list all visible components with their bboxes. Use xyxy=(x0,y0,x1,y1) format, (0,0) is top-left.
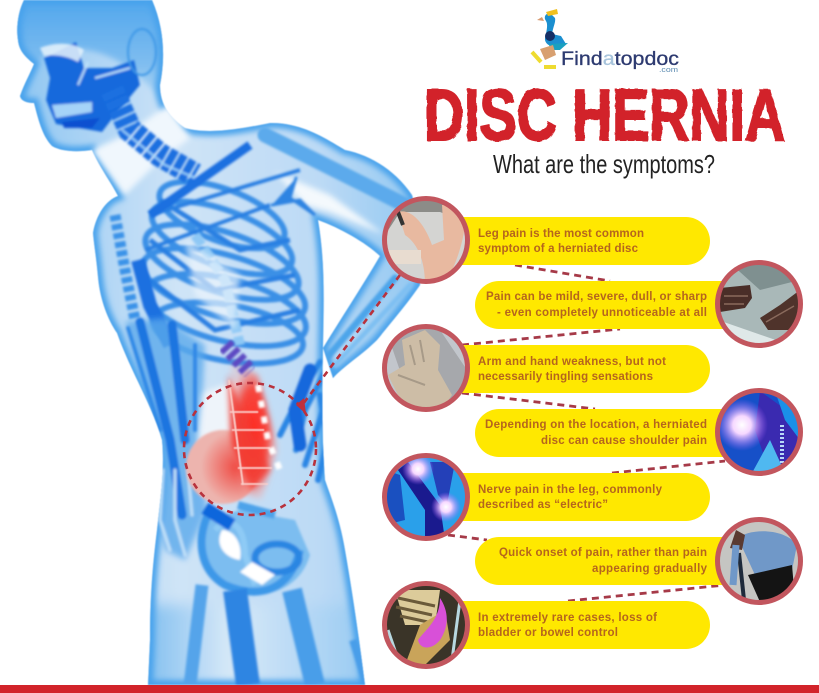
photo: leg xyxy=(387,201,465,279)
text: appearing gradually xyxy=(592,563,708,575)
pill xyxy=(475,409,740,457)
ring xyxy=(384,456,468,538)
photo: abdomen xyxy=(718,263,800,345)
spine and clavicle xyxy=(112,90,250,345)
photo: shoulder xyxy=(720,393,798,471)
left arm xyxy=(125,318,207,560)
anatomical body figure xyxy=(10,0,421,693)
sternum highlight xyxy=(185,240,240,330)
text: bladder or bowel control xyxy=(478,627,618,639)
symptom 1 xyxy=(384,198,710,285)
symptom 3 xyxy=(384,326,710,412)
subtitle: What are the symptoms? xyxy=(493,149,715,179)
symptom 4 xyxy=(475,390,800,474)
text: Quick onset of pain, rather than pain xyxy=(499,547,707,559)
text: Pain can be mild, severe, dull, or sharp xyxy=(486,291,707,303)
symptom 6 xyxy=(475,520,800,602)
light neck and armpit areas xyxy=(92,105,190,195)
ring xyxy=(384,198,468,282)
ring xyxy=(384,326,468,410)
text: Leg pain is the most common xyxy=(478,228,644,240)
pill xyxy=(440,601,710,649)
icon: duck mascot xyxy=(532,9,568,67)
text: described as “electric” xyxy=(478,499,608,511)
pill xyxy=(440,473,710,521)
disc hernia area red xyxy=(186,345,280,504)
dashed pointer to arm with arrow xyxy=(296,275,400,414)
ring xyxy=(384,584,468,666)
text: Arm and hand weakness, but not xyxy=(478,356,666,368)
dashed focus circle xyxy=(184,383,316,515)
skull xyxy=(40,29,156,132)
pelvis xyxy=(201,505,310,595)
head shading xyxy=(16,0,164,93)
photo: man bending xyxy=(718,520,800,602)
bottom red bar xyxy=(0,685,819,693)
leg bones xyxy=(190,585,367,685)
text: - even completely unnoticeable at all xyxy=(497,307,707,319)
pill xyxy=(475,281,740,329)
symptom 7 xyxy=(384,584,710,666)
ring xyxy=(718,520,800,602)
body edge glow xyxy=(17,0,421,685)
ring xyxy=(718,390,800,474)
pill xyxy=(440,345,710,393)
text: Depending on the location, a herniated xyxy=(485,419,707,431)
ring xyxy=(718,262,800,346)
logo wordmark: Findatopdoc xyxy=(561,49,679,70)
text: necessarily tingling sensations xyxy=(478,371,653,383)
photo: nerve pain leg xyxy=(387,458,465,536)
ribcage xyxy=(135,168,313,374)
pill xyxy=(440,217,710,265)
text: disc can cause shoulder pain xyxy=(541,435,707,447)
logo xyxy=(532,9,679,74)
text: symptom of a herniated disc xyxy=(478,243,639,255)
pill xyxy=(475,537,740,585)
symptom 2 xyxy=(475,262,800,346)
text: In extremely rare cases, loss of xyxy=(478,612,657,624)
logo domain: .com xyxy=(659,67,678,74)
right arm bones xyxy=(265,135,410,480)
connector lines xyxy=(448,265,725,601)
thighs shading xyxy=(148,598,358,683)
photo: hands xyxy=(387,329,465,407)
photo: abdominal organs xyxy=(385,584,467,666)
symptom 5 xyxy=(384,453,710,540)
text: Nerve pain in the leg, commonly xyxy=(478,484,663,496)
